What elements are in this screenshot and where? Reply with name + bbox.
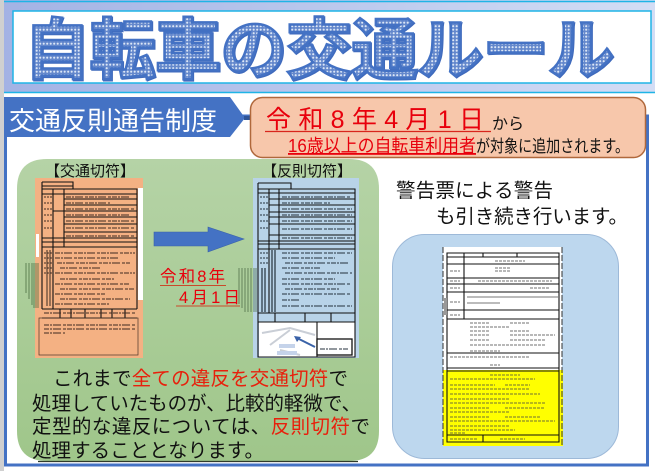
section heading arrow: 交通反則通告制度 xyxy=(9,106,217,136)
section heading arrow xyxy=(4,97,252,137)
heading: traffic ticket: 【交通切符】 xyxy=(45,163,135,180)
date label: 令和8年 xyxy=(160,267,225,286)
warning text: も引き続き行います。 xyxy=(436,206,628,228)
form: traffic ticket xyxy=(26,178,143,358)
explanatory text: 処理していたものが、比較的軽微で、 xyxy=(32,393,361,415)
title: 自転車の交通ルール xyxy=(24,13,614,87)
form: warning ticket xyxy=(443,247,563,446)
panel: warning ticket xyxy=(392,234,618,458)
date label xyxy=(160,267,240,307)
explanatory text: これまで全ての違反を交通切符で xyxy=(53,368,348,390)
explanatory text xyxy=(32,368,370,462)
warning text xyxy=(396,180,628,228)
warning text: 警告票による警告 xyxy=(396,180,553,202)
callout: start date xyxy=(250,98,646,158)
callout: start date: 16歳以上の自転車利用者 xyxy=(288,136,476,156)
callout: start date: から xyxy=(492,116,524,133)
main panel frame xyxy=(6,116,648,465)
heading: violation ticket: 【反則切符】 xyxy=(262,163,352,180)
callout: start date: 令和8年4月1日 xyxy=(266,106,484,134)
arrow: ticket change xyxy=(154,227,244,252)
explanatory text: 処理することとなります。 xyxy=(32,440,264,462)
explanatory text: 定型的な違反については、反則切符で xyxy=(32,416,370,438)
panel: ticket change xyxy=(17,159,379,462)
date label: 4月1日 xyxy=(179,289,240,307)
form: violation ticket xyxy=(239,178,359,358)
